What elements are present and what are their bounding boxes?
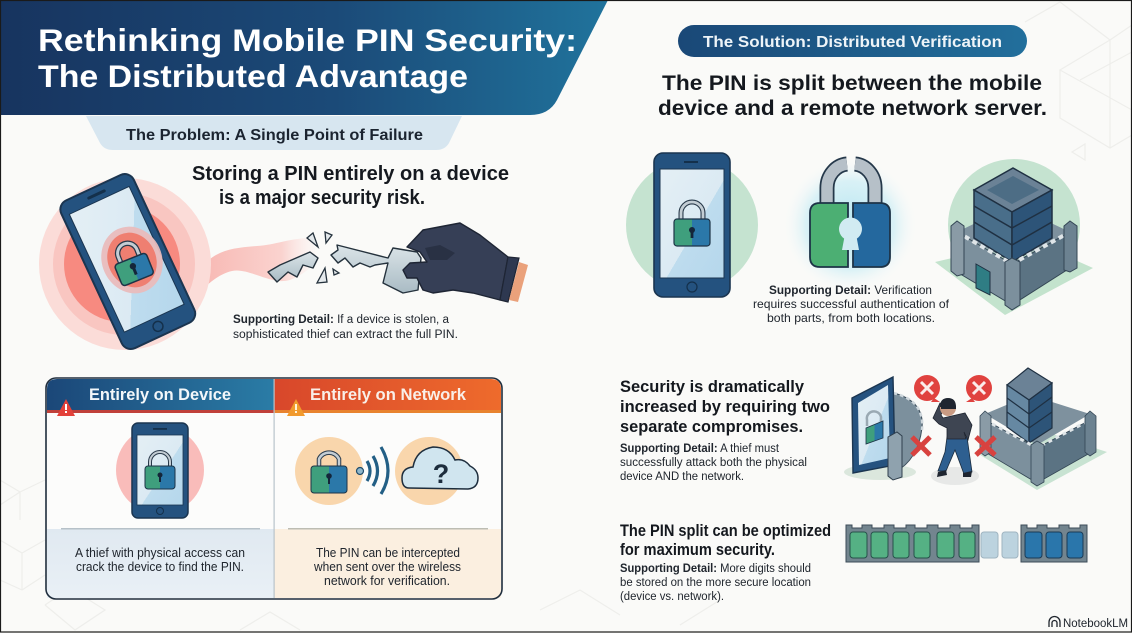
compromises supporting detail: device AND the network.: [620, 471, 744, 483]
network digits block: [1021, 525, 1087, 562]
optimize supporting detail: [620, 563, 811, 603]
glove cuff: [500, 257, 519, 302]
red x left: [912, 437, 930, 455]
problem supporting detail: Supporting Detail: If a device is stolen, a: [233, 314, 450, 326]
icon: phone in green circle: [626, 153, 758, 297]
icon: padlock on phone: [108, 238, 154, 286]
compromises heading: Security is dramatically: [620, 377, 805, 396]
solution supporting detail: [753, 283, 950, 325]
icon: split padlock: [782, 157, 918, 293]
icon: warning triangle: [287, 399, 305, 416]
optimize supporting detail: (device vs. network).: [620, 591, 724, 603]
solution supporting detail: both parts, from both locations.: [767, 311, 935, 325]
solution heading: The PIN is split between the mobile: [662, 72, 1042, 95]
problem supporting detail: sophisticated thief can extract the full PIN.: [233, 329, 458, 341]
panel: entirely on network: [274, 379, 501, 598]
optimize heading: The PIN split can be optimized: [620, 521, 831, 540]
icon: cloud with question mark: [395, 437, 478, 505]
compromises heading: separate compromises.: [620, 417, 803, 436]
icon: warning triangle: [57, 399, 75, 416]
neutral digits: [981, 532, 1018, 558]
pin split diagram: [846, 525, 1087, 562]
device caption: crack the device to find the PIN.: [76, 560, 244, 574]
icon: server in castle: [935, 159, 1093, 315]
wrist: [509, 262, 528, 302]
alert bubble right: [966, 375, 992, 402]
key shards: [307, 232, 339, 283]
network caption: network for verification.: [324, 574, 450, 588]
network caption: [313, 546, 461, 588]
network heading: Entirely on Network: [310, 386, 467, 404]
solution supporting detail: Supporting Detail: Verification: [769, 283, 932, 297]
wisp connecting phone and key: [198, 238, 318, 292]
server fortress: [977, 368, 1107, 490]
icon: alarmed phone with red rings: [39, 171, 211, 352]
device caption: [75, 546, 245, 574]
glove: [403, 223, 508, 300]
device heading: Entirely on Device: [89, 386, 231, 404]
alert bubble left: [914, 375, 940, 402]
solution supporting detail: requires successful authentication of: [753, 297, 950, 311]
section heading: the problem: The Problem: A Single Point of Failure: [126, 127, 423, 144]
optimize heading: [620, 521, 831, 559]
compromises heading: increased by requiring two: [620, 397, 830, 416]
optimize supporting detail: be stored on the more secure location: [620, 577, 811, 589]
device digits block: [846, 525, 979, 562]
server stack: [974, 168, 1052, 262]
solution heading: device and a remote network server.: [658, 97, 1047, 120]
icon: broken key held by gloved hand: [268, 223, 528, 302]
device caption: A thief with physical access can: [75, 546, 245, 560]
comparison table: [46, 378, 502, 599]
compromises supporting detail: Supporting Detail: A thief must: [620, 443, 780, 455]
key shaft and head: [331, 245, 421, 293]
illustration: thief blocked by phone and server fortresses: [844, 368, 1107, 490]
optimize heading: for maximum security.: [620, 540, 775, 559]
notebooklm watermark: NotebookLM: [1063, 618, 1128, 630]
optimize supporting detail: Supporting Detail: More digits should: [620, 563, 811, 575]
network caption: when sent over the wireless: [313, 560, 461, 574]
problem heading: is a major security risk.: [219, 187, 425, 209]
title banner: [0, 0, 608, 115]
thief: [931, 398, 979, 485]
phone fortress: [844, 377, 922, 480]
section heading: the problem: [86, 116, 462, 150]
compromises heading: [620, 377, 830, 436]
section heading: the solution: The Solution: Distributed Verification: [703, 34, 1002, 51]
network caption: The PIN can be intercepted: [316, 546, 460, 560]
problem heading: [192, 163, 509, 209]
title text: Rethinking Mobile PIN Security:: [38, 22, 577, 58]
problem heading: Storing a PIN entirely on a device: [192, 163, 509, 185]
compromises supporting detail: successfully attack both the physical: [620, 457, 807, 469]
solution heading: [658, 72, 1047, 120]
panel: entirely on device: [47, 379, 274, 598]
section heading: the solution: [678, 25, 1027, 57]
icon: padlock with signal: [295, 437, 388, 505]
red x right: [976, 437, 995, 455]
broken key tip: [268, 252, 318, 282]
problem supporting detail: [233, 314, 458, 341]
icon: cloud with question mark: ?: [433, 459, 449, 489]
compromises supporting detail: [620, 443, 807, 483]
title banner: The Distributed Advantage: [38, 58, 468, 94]
castle walls: [957, 232, 1012, 305]
icon: circle and phone: [116, 423, 204, 518]
